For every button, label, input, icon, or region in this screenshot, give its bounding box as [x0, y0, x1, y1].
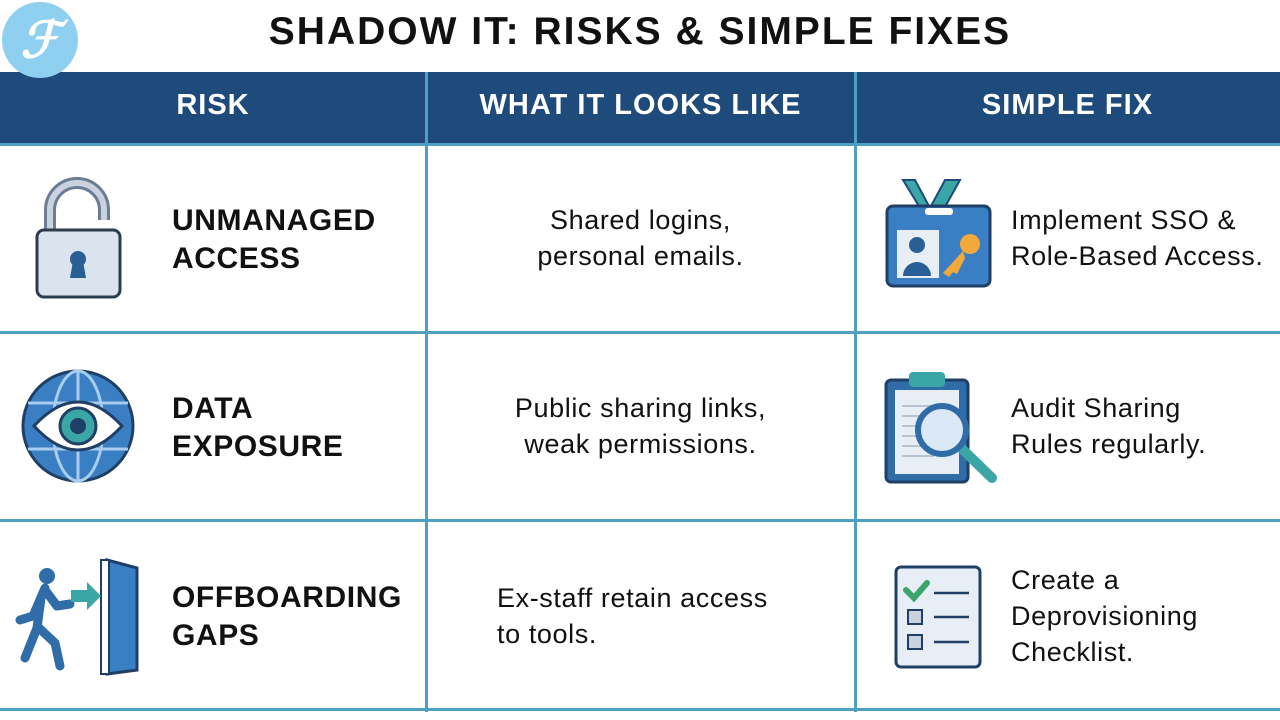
looks like: shared logins: personal emails.	[537, 241, 744, 271]
fix: checklist: Checklist.	[1011, 637, 1134, 667]
header: simple fix: SIMPLE FIX	[982, 89, 1153, 121]
fix: SSO: Implement SSO &	[1011, 205, 1236, 235]
risk: offboarding gaps: GAPS	[172, 619, 259, 652]
risk: unmanaged access: UNMANAGED	[172, 204, 376, 237]
header row	[0, 72, 1280, 144]
risk: unmanaged access	[172, 204, 376, 275]
icon: checklist	[894, 566, 982, 668]
risk: data exposure: DATA	[172, 392, 253, 425]
fix: SSO	[1011, 205, 1263, 271]
header: what it looks like: WHAT IT LOOKS LIKE	[480, 89, 801, 121]
looks like: ex-staff	[497, 583, 768, 649]
fix: checklist	[1011, 565, 1198, 667]
looks like: public links: weak permissions.	[524, 429, 757, 459]
looks like: ex-staff: to tools.	[497, 619, 597, 649]
risk: unmanaged access: ACCESS	[172, 242, 301, 275]
looks like: ex-staff: Ex-staff retain access	[497, 583, 768, 613]
fix: audit: Audit Sharing	[1011, 393, 1181, 423]
fix: audit	[1011, 393, 1206, 459]
looks like: public links	[515, 393, 766, 459]
header: risk: RISK	[176, 89, 250, 121]
title: SHADOW IT: RISKS & SIMPLE FIXES	[269, 10, 1011, 53]
icon: ID badge with key	[886, 179, 992, 288]
fix: checklist: Create a	[1011, 565, 1119, 595]
icon: person exiting door	[16, 558, 138, 676]
logo: ℱ	[20, 12, 60, 68]
icon: globe with eye	[22, 370, 134, 482]
fix: checklist: Deprovisioning	[1011, 601, 1198, 631]
logo	[2, 2, 78, 78]
looks like: public links: Public sharing links,	[515, 393, 766, 423]
looks like: shared logins	[537, 205, 744, 271]
icon: open padlock	[36, 177, 122, 298]
risk: data exposure: EXPOSURE	[172, 430, 344, 463]
risk: offboarding gaps: OFFBOARDING	[172, 581, 402, 614]
fix: SSO: Role-Based Access.	[1011, 241, 1263, 271]
fix: audit: Rules regularly.	[1011, 429, 1206, 459]
looks like: shared logins: Shared logins,	[550, 205, 731, 235]
risk: offboarding gaps	[172, 581, 402, 652]
icon: clipboard with magnifier	[884, 372, 997, 484]
risk: data exposure	[172, 392, 344, 463]
